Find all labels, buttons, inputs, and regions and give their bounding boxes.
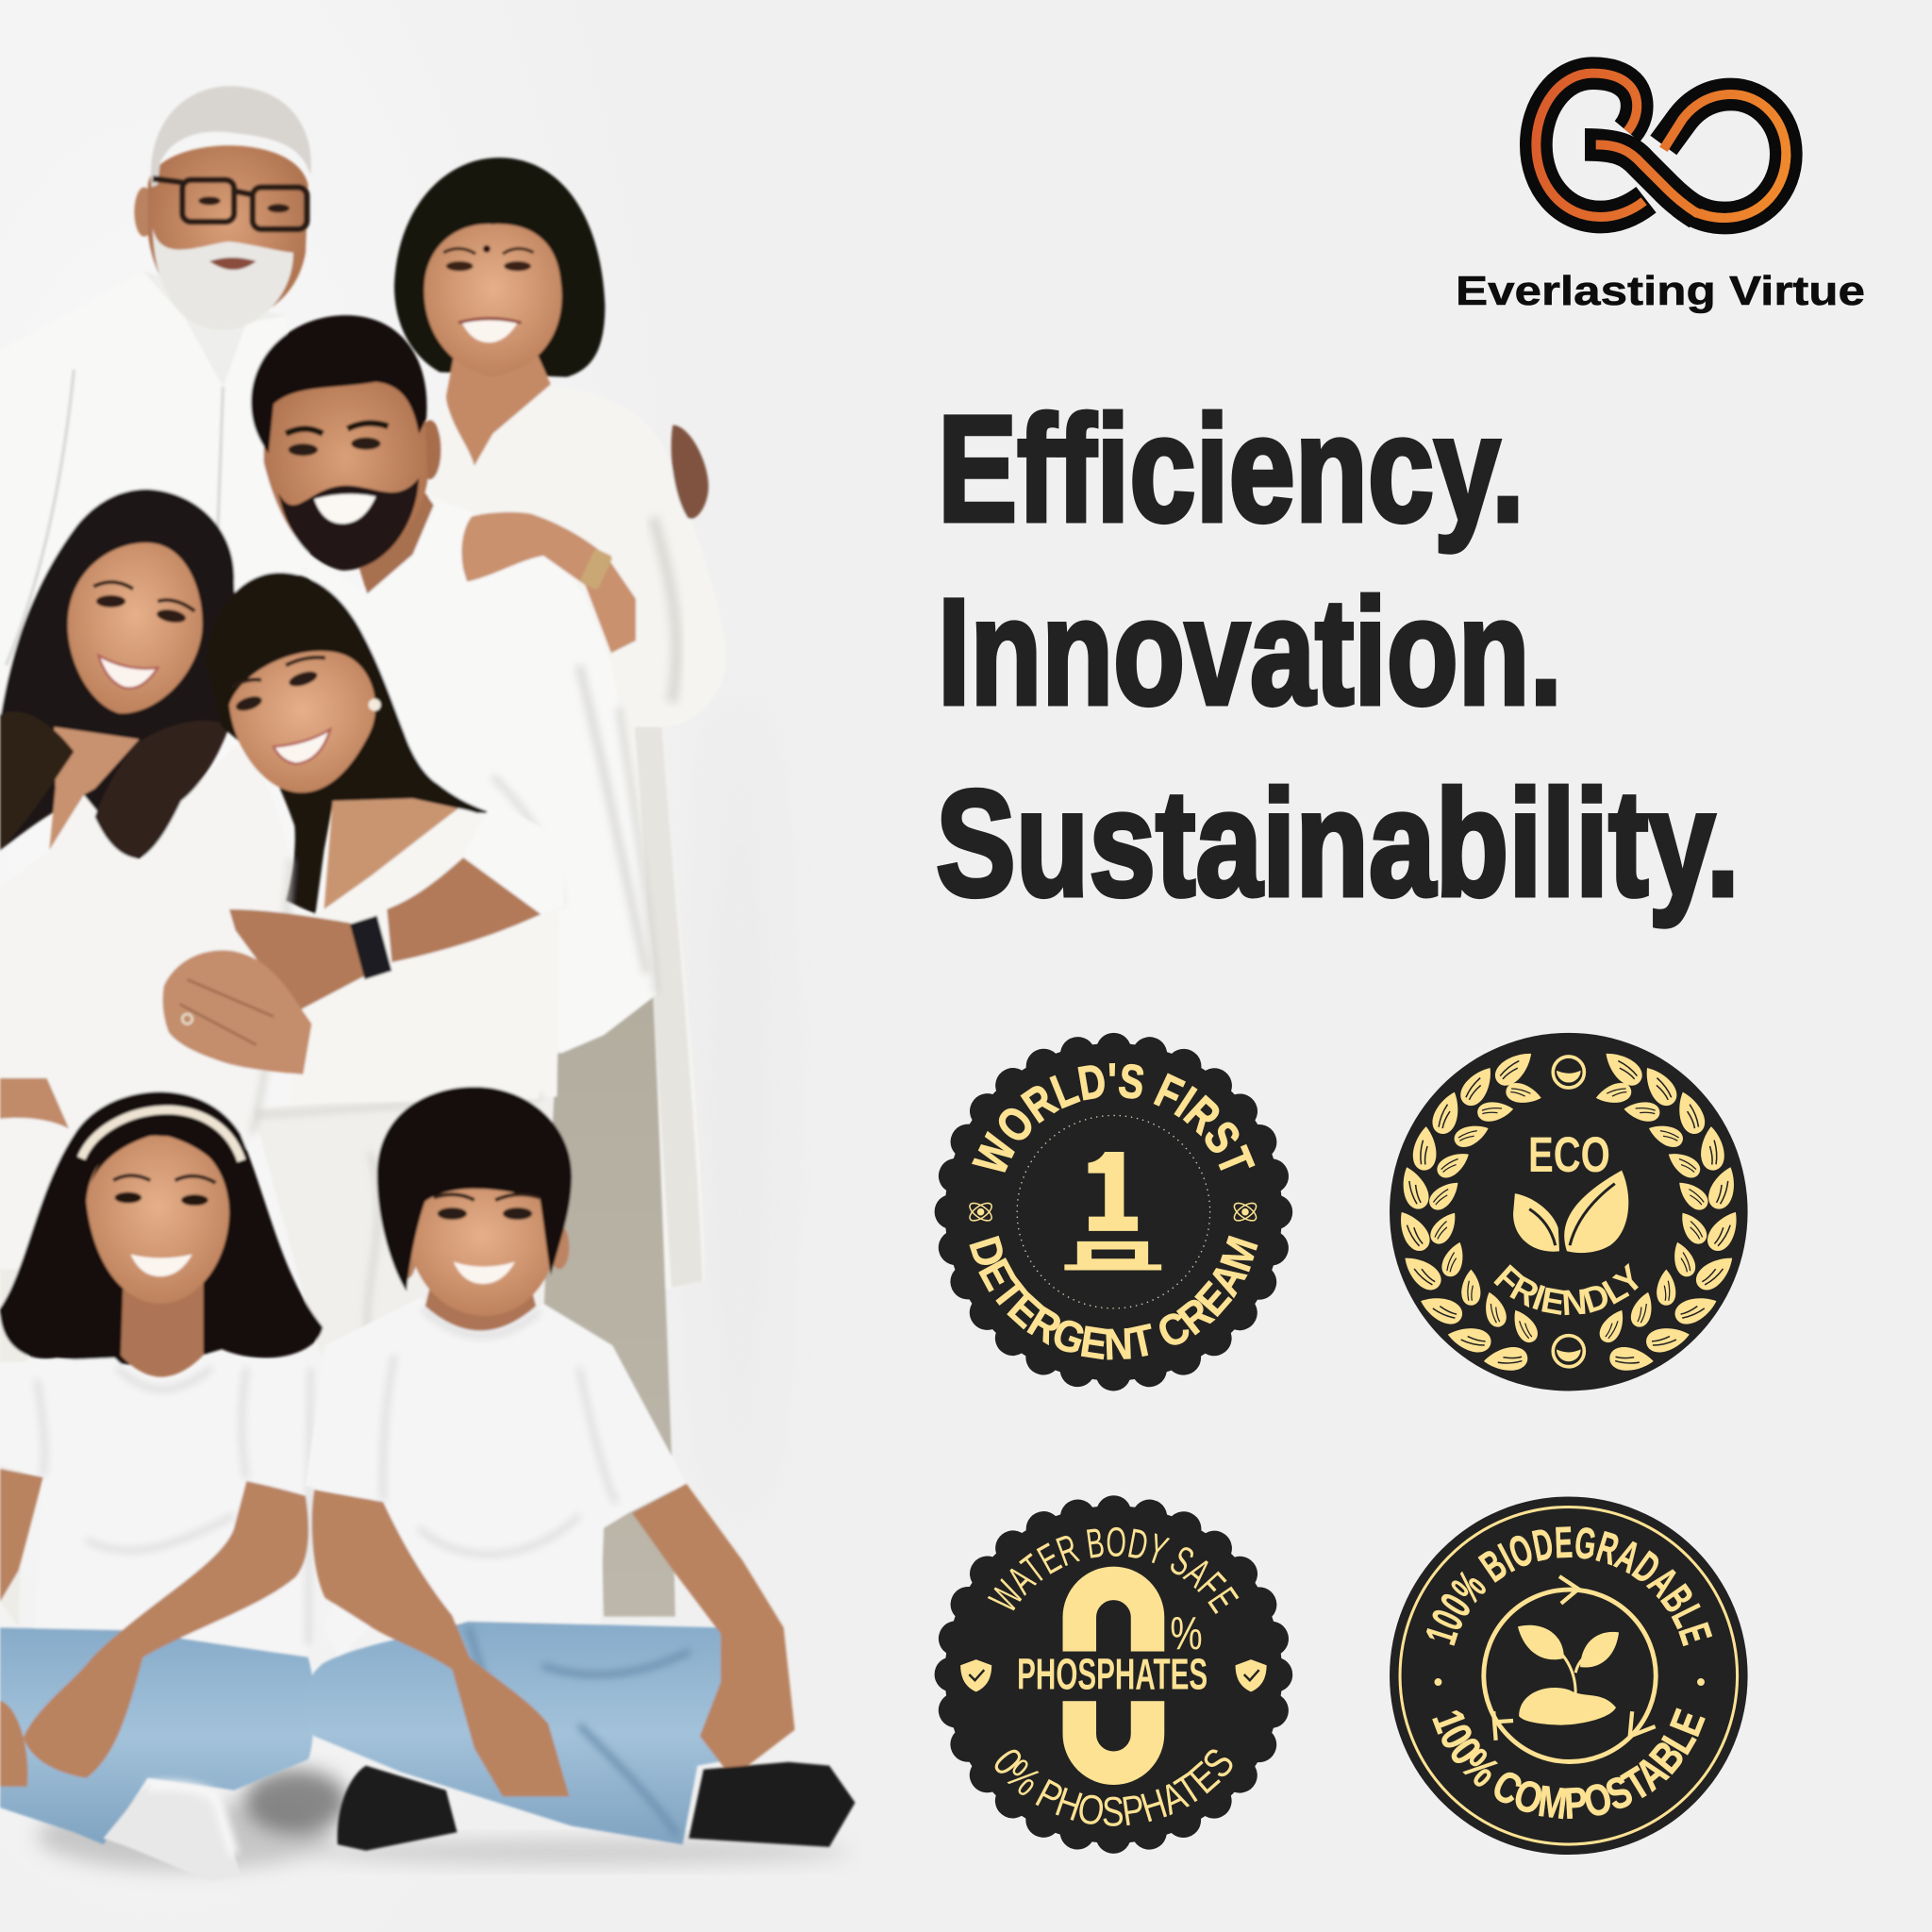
daughter-in-law dress [253,1084,555,1356]
heading: Innovation. [938,567,1562,736]
badge: world's first detergent cream [934,1032,1292,1391]
mother blouse [0,745,291,1343]
boy jeans [303,1622,732,1844]
mother head [0,542,229,858]
badge: eco friendly [1390,1032,1748,1391]
badge: zero phosphates: % [1170,1608,1203,1659]
daughter-in-law head [229,651,381,792]
badge: eco friendly: FRIENDLY [1493,1262,1639,1315]
daughter-in-law blouse [286,808,559,1104]
logo: infinity mark [1536,74,1786,218]
badge: zero phosphates: 0% PHOSPHATES [994,1749,1232,1826]
heading: Efficiency. [938,384,1524,553]
badge: zero phosphates: WATER BODY SAFE [987,1526,1240,1614]
clothing shadow contours [253,708,657,1349]
son's sleeve, arm, hand and watch [229,801,564,1010]
badge: zero phosphates: PHOSPHATES [1017,1649,1208,1698]
garment behind girl [0,1269,31,1626]
son head [251,315,441,594]
daughter-in-law chest [325,798,458,909]
heading [936,384,1740,927]
badge: zero phosphates [934,1495,1292,1854]
badge: eco friendly: ECO [1528,1127,1610,1183]
badge: biodegradable and compostable [1390,1496,1748,1855]
boy [306,1087,687,1657]
grandfather head [7,86,311,665]
daughter-in-law sleeve and clasped hands [162,950,559,1104]
badge: biodegradable and compostable: 100% COMPOSTABLE [1432,1707,1706,1819]
badge: biodegradable and compostable: 100% BIODEGRADABLE [1426,1526,1713,1647]
son shirt [295,496,657,1054]
girl arms and hands [0,1469,308,1787]
photo: family of six in white [0,0,855,1932]
boy black socks [338,1762,855,1851]
grandmother hand on shoulder [461,512,636,653]
boy arms and hands [311,1484,794,1796]
son trousers [542,995,675,1617]
badge: world's first detergent cream: WORLD'S FIRST [972,1063,1255,1173]
logo wordmark: Everlasting Virtue [1456,268,1865,314]
daughter-in-law hair [206,573,492,914]
grandmother head [394,158,605,466]
mother arm [0,1078,69,1128]
badges [934,1032,1748,1855]
girl [0,1091,323,1657]
girl jeans and sock [0,1627,314,1881]
grandfather shirt [0,271,314,789]
heading: Sustainability. [936,758,1740,927]
badge: world's first detergent cream: DETERGENT CREAM [970,1236,1258,1360]
mother hair back [0,490,236,858]
grandmother kurta [431,385,725,1293]
